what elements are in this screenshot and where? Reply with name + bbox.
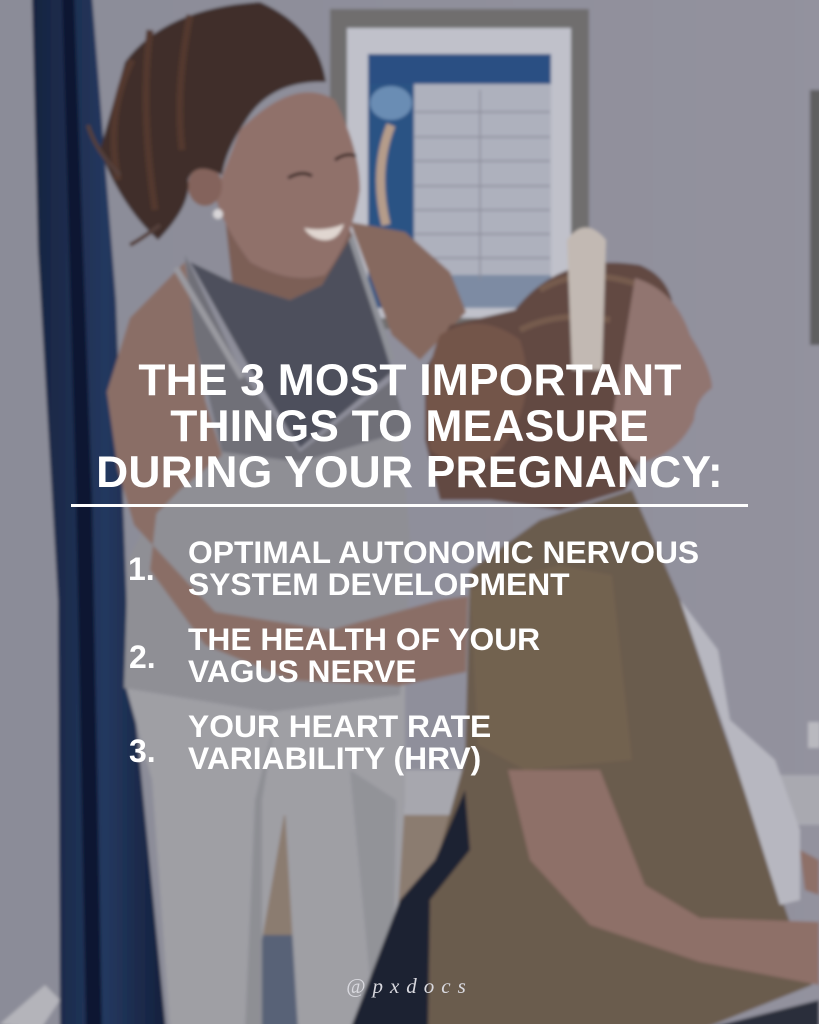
- cardigan and body: [420, 490, 812, 1024]
- list item 3: [188, 708, 491, 776]
- shirt: [124, 420, 412, 712]
- hair and bun: [425, 263, 672, 510]
- list item 1: SYSTEM DEVELOPMENT: [188, 566, 570, 602]
- list item 2: VAGUS NERVE: [188, 653, 417, 689]
- neck and face: [222, 190, 352, 300]
- list item 1: OPTIMAL AUTONOMIC NERVOUS: [188, 534, 699, 570]
- seated woman: [350, 228, 819, 1024]
- belly: [680, 600, 800, 905]
- list item 2: [188, 621, 540, 689]
- list item 3: VARIABILITY (HRV): [188, 740, 481, 776]
- pants: [124, 670, 405, 1024]
- list number 1: 1.: [128, 551, 155, 587]
- tank top upper: [185, 255, 408, 462]
- headband: [567, 228, 606, 370]
- face: [612, 278, 712, 462]
- title: THE 3 MOST IMPORTANT: [138, 356, 682, 405]
- list number 2: 2.: [129, 639, 156, 675]
- hair: [100, 2, 326, 240]
- title: THINGS TO MEASURE: [170, 402, 649, 451]
- arm: [508, 770, 819, 985]
- chair: [350, 790, 470, 1024]
- right shoulder: [350, 222, 466, 360]
- standing woman: [88, 2, 468, 1024]
- list item 2: THE HEALTH OF YOUR: [188, 621, 540, 657]
- list number 3: 3.: [129, 733, 156, 769]
- list item 3: YOUR HEART RATE: [188, 708, 491, 744]
- lower arm right: [800, 850, 819, 895]
- title: [96, 356, 723, 497]
- title: DURING YOUR PREGNANCY:: [96, 448, 723, 497]
- framed poster: [330, 9, 589, 329]
- left shoulder and arm: [107, 262, 468, 686]
- handle: @pxdocs: [346, 974, 473, 998]
- right frame edge: [810, 90, 819, 345]
- list item 1: [188, 534, 699, 602]
- sleeve: [470, 565, 632, 770]
- curtain: [32, 0, 166, 1024]
- tank straps: [176, 268, 242, 378]
